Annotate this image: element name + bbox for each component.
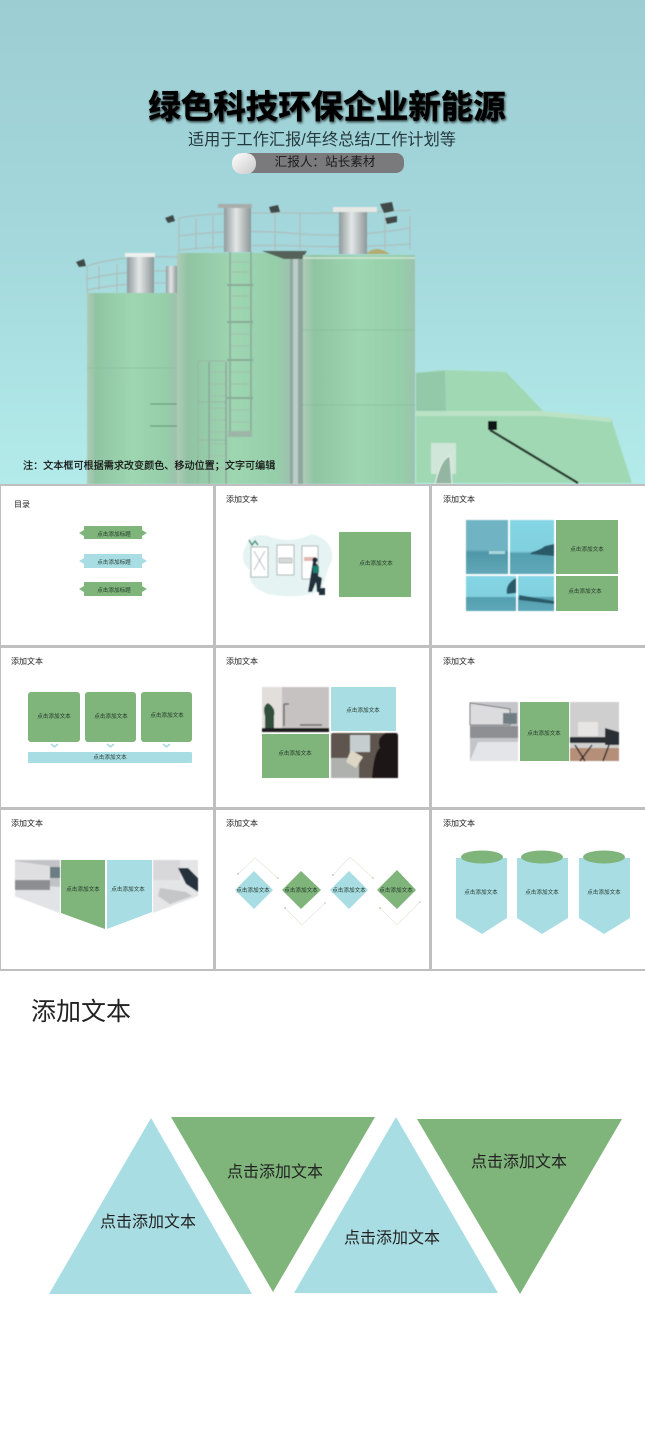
text box bottom — [556, 576, 618, 611]
text box top: 点击添加文本 — [570, 545, 604, 553]
heading: 添加文本 — [226, 656, 258, 666]
diamond 3 — [330, 871, 368, 909]
sea photo collage — [466, 520, 554, 611]
heading: 添加文本 — [11, 818, 43, 828]
subtitle: 适用于工作汇报/年终总结/工作计划等 — [188, 131, 456, 149]
text box — [339, 532, 411, 597]
slide 7 — [1, 810, 213, 969]
chevrons — [51, 744, 170, 747]
card 1 — [28, 692, 80, 742]
summary bar: 点击添加文本 — [93, 753, 127, 761]
triangle 1 — [49, 1118, 252, 1294]
blue panel: 点击添加文本 — [111, 885, 145, 893]
green panel: 点击添加文本 — [66, 885, 100, 893]
diamond 1 — [235, 871, 273, 909]
blue panel — [107, 860, 152, 929]
slide 4 — [1, 648, 213, 807]
triangle 2 — [171, 1117, 375, 1292]
text box blue — [331, 687, 396, 731]
card 3 — [141, 692, 192, 742]
photo: laptop user — [331, 733, 398, 778]
slide 6 — [432, 648, 645, 807]
item 1: 点击添加标题 — [97, 530, 131, 538]
diamond 2: 点击添加文本 — [284, 886, 318, 894]
summary bar — [28, 752, 192, 763]
triangle 1: 点击添加文本 — [100, 1213, 196, 1231]
triangle 2: 点击添加文本 — [227, 1163, 323, 1181]
slide 5 — [216, 648, 429, 807]
slide 8 — [216, 810, 429, 969]
cylinder 1 — [456, 850, 507, 934]
illustration: designer at wireframes — [243, 534, 332, 596]
green panel — [61, 860, 105, 929]
heading: 添加文本 — [11, 656, 43, 666]
text box green: 点击添加文本 — [278, 749, 312, 757]
presenter pill: 汇报人：站长素材 — [275, 155, 376, 169]
photo: desk — [262, 687, 329, 732]
diamond 1: 点击添加文本 — [236, 886, 270, 894]
text box green — [262, 734, 329, 778]
photo left — [15, 860, 60, 913]
text box top — [556, 520, 618, 574]
text box: 点击添加文本 — [527, 729, 561, 737]
cylinder 2: 点击添加文本 — [525, 888, 559, 896]
triangle 4: 点击添加文本 — [471, 1153, 567, 1171]
diamond 2 — [282, 871, 321, 909]
cylinder 1: 点击添加文本 — [464, 888, 498, 896]
cylinder 3 — [579, 850, 630, 934]
outline accents — [238, 857, 420, 925]
slide grid background — [0, 484, 645, 971]
footnote: 注：文本框可根据需求改变颜色、移动位置；文字可编辑 — [23, 459, 275, 472]
card 3: 点击添加文本 — [150, 711, 184, 719]
heading: 添加文本 — [443, 818, 475, 828]
item 2: 点击添加标题 — [97, 558, 131, 566]
presenter pill — [232, 153, 404, 174]
item 2 — [79, 554, 147, 568]
card 1: 点击添加文本 — [37, 712, 71, 720]
cover panel — [0, 0, 645, 484]
diamond 3: 点击添加文本 — [332, 886, 366, 894]
slide 1: contents — [1, 486, 213, 645]
heading: 添加文本 — [31, 998, 131, 1026]
item 3 — [79, 582, 147, 596]
triangle 4 — [417, 1119, 622, 1294]
text box: 点击添加文本 — [359, 559, 393, 567]
cylinder 3: 点击添加文本 — [587, 888, 621, 896]
text box bottom: 点击添加文本 — [568, 587, 602, 595]
heading: 添加文本 — [226, 494, 258, 504]
card 2 — [85, 692, 136, 742]
heading: 添加文本 — [226, 818, 258, 828]
slide 9 — [432, 810, 645, 969]
slide 3 — [432, 486, 645, 645]
photo: laptop on table — [570, 702, 619, 761]
slide 2 — [216, 486, 429, 645]
title: 绿色科技环保企业新能源 — [148, 89, 506, 125]
heading: 目录 — [14, 500, 30, 509]
large slide — [0, 971, 645, 1455]
cylinder 2 — [517, 850, 568, 934]
heading: 添加文本 — [443, 656, 475, 666]
silo illustration — [76, 202, 632, 484]
item 1 — [79, 526, 147, 539]
photo: office — [470, 702, 518, 761]
photo right — [153, 860, 198, 913]
triangle 3 — [294, 1117, 498, 1293]
triangle 3: 点击添加文本 — [344, 1229, 440, 1247]
diamond 4 — [377, 870, 416, 909]
heading: 添加文本 — [443, 494, 475, 504]
text box — [520, 702, 569, 761]
building — [416, 370, 632, 483]
accent dots — [237, 873, 421, 909]
card 2: 点击添加文本 — [94, 712, 128, 720]
text box blue: 点击添加文本 — [346, 706, 380, 714]
diamond 4: 点击添加文本 — [379, 886, 413, 894]
item 3: 点击添加标题 — [97, 586, 131, 594]
